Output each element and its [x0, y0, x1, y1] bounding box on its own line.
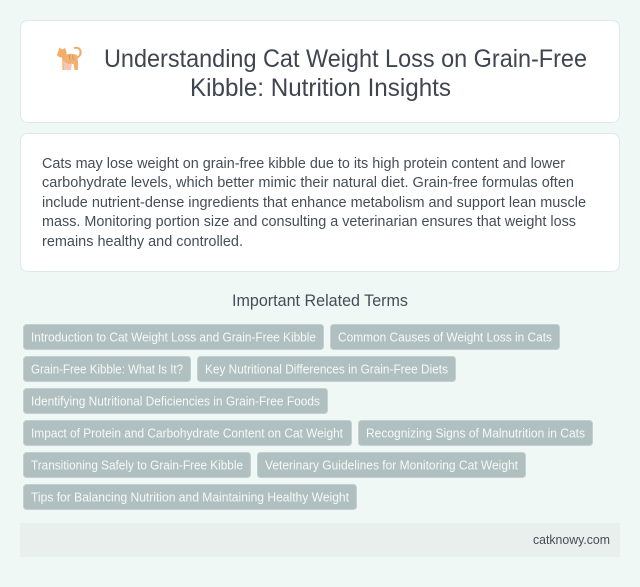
- tag: Tips for Balancing Nutrition and Maintaining Healthy Weight: [31, 490, 349, 504]
- tag: [198, 356, 456, 382]
- tag list: related terms: [24, 324, 592, 510]
- text block: summary: include nutrient-dense ingredients that enhance metabolism and support lean muscle: [42, 195, 586, 211]
- icon: cat: [57, 48, 81, 70]
- panel: summary paragraph: [20, 134, 620, 272]
- tag: Impact of Protein and Carbohydrate Content on Cat Weight: [31, 426, 343, 440]
- tag: Introduction to Cat Weight Loss and Grain-Free Kibble: [31, 330, 316, 344]
- tag: [24, 452, 250, 478]
- tag: [24, 420, 352, 446]
- tag: [24, 324, 324, 350]
- panel: title card: [20, 20, 620, 122]
- tag: Recognizing Signs of Malnutrition in Cats: [366, 426, 585, 440]
- tag: [330, 324, 560, 350]
- tag: [258, 452, 526, 478]
- tag: [24, 484, 356, 510]
- footer text: catknowy.com: [533, 532, 610, 547]
- text block: summary: mass. Monitoring portion size and consulting a veterinarian ensures that weight loss: [42, 214, 576, 230]
- tag: Key Nutritional Differences in Grain-Free Diets: [205, 362, 448, 376]
- text block: summary: carbohydrate levels, which better mimic their natural diet. Grain-free formulas often: [42, 175, 574, 191]
- tag: Veterinary Guidelines for Monitoring Cat Weight: [265, 458, 518, 472]
- footer bar: [20, 523, 620, 557]
- tag: Common Causes of Weight Loss in Cats: [338, 330, 552, 344]
- tag: [24, 388, 328, 414]
- tag: Identifying Nutritional Deficiencies in Grain-Free Foods: [31, 394, 320, 408]
- text block: summary: Cats may lose weight on grain-free kibble due to its high protein content and lower: [42, 156, 565, 172]
- tag: [358, 420, 592, 446]
- title: Understanding Cat Weight Loss on Grain-Free: [104, 46, 587, 73]
- heading: related terms: Important Related Terms: [232, 292, 408, 310]
- tag: Grain-Free Kibble: What Is It?: [31, 362, 183, 376]
- text block: summary: [42, 156, 586, 250]
- tag: [24, 356, 190, 382]
- title: [104, 46, 587, 102]
- text block: summary: remains healthy and controlled.: [42, 234, 243, 250]
- title: Kibble: Nutrition Insights: [190, 75, 451, 102]
- tag: Transitioning Safely to Grain-Free Kibble: [31, 458, 243, 472]
